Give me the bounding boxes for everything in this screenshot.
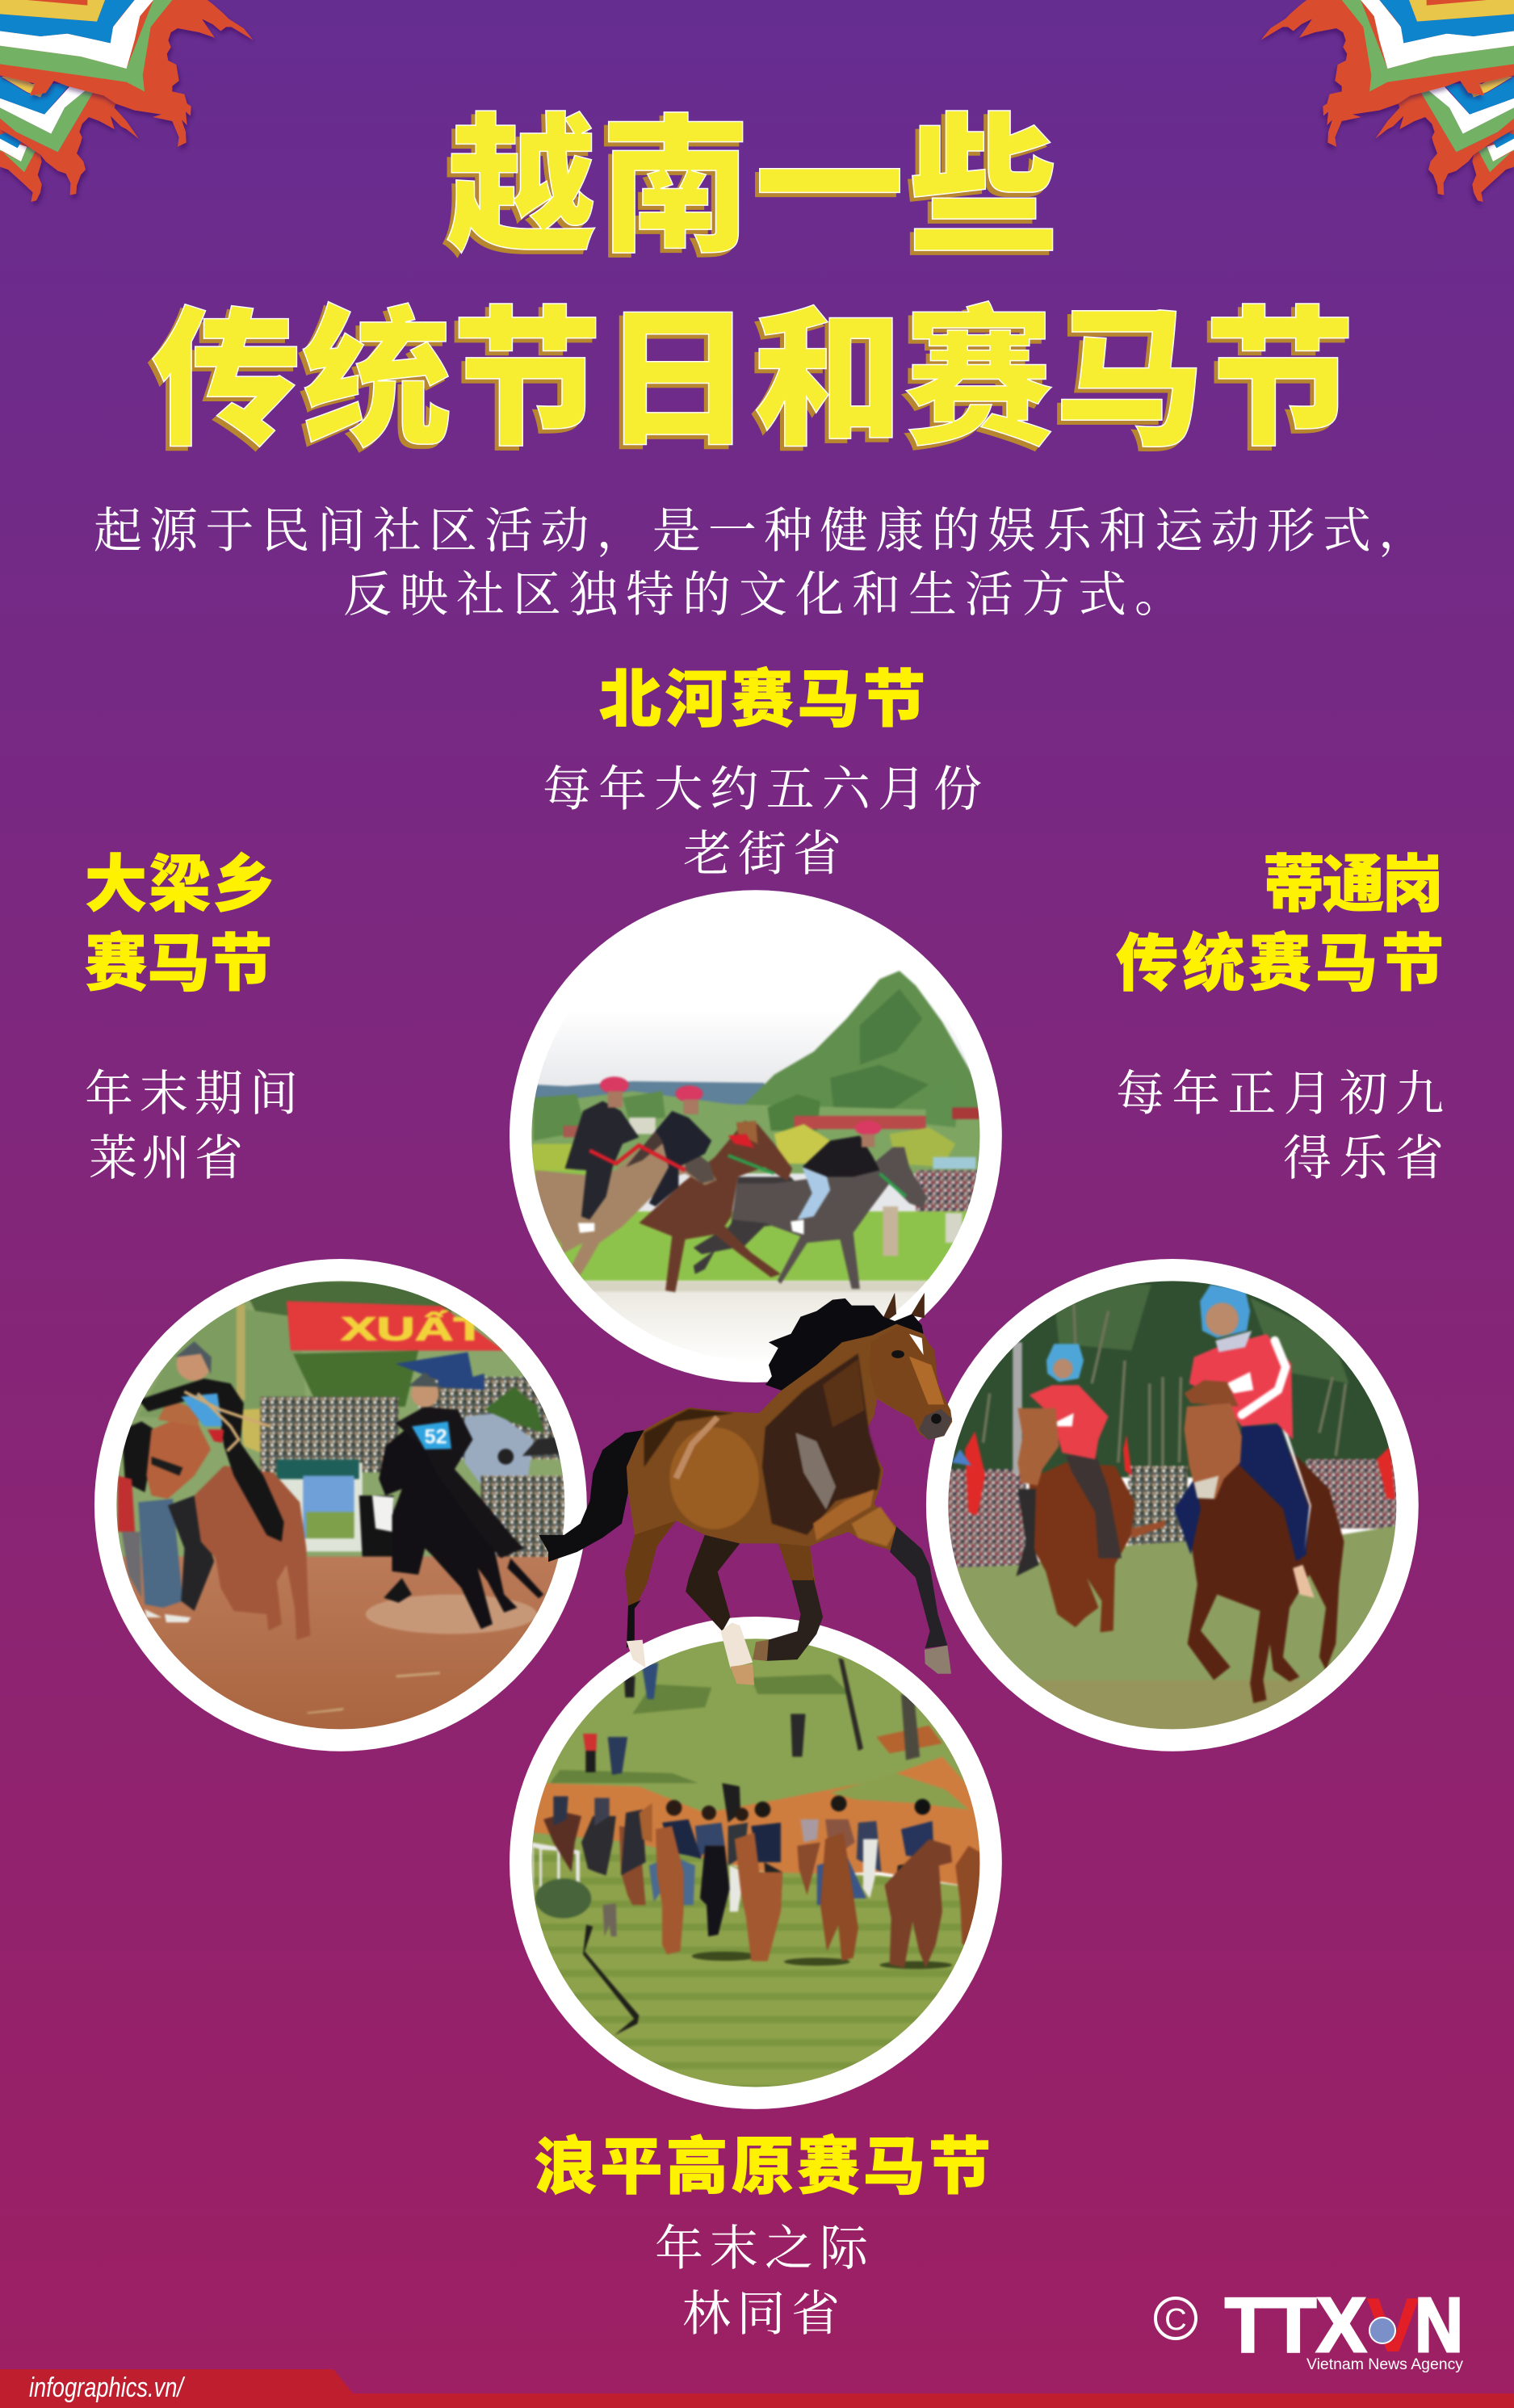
heading: Da Nang commune race: [85, 835, 275, 1004]
logo: copyright and agency: N: [1415, 2282, 1463, 2368]
photo circle: Lai Chau race: 52: [425, 1426, 447, 1449]
heading: Lam Dong race: 浪平高原赛马节: [535, 2117, 991, 2207]
text: Dak Lak time and place: [1116, 1055, 1444, 1189]
logo: copyright and agency: V: [1366, 2282, 1420, 2368]
photo circle: Lai Chau race: [94, 1259, 587, 1751]
text: Dak Lak time and place: 每年正月初九: [1116, 1055, 1444, 1125]
horse far hind leg: [686, 1535, 740, 1631]
text: Dak Lak time and place: 得乐省: [1283, 1120, 1444, 1189]
text: Lai Chau time and place: [85, 1055, 298, 1189]
text: Bac Ha time and place: 老街省: [683, 816, 841, 885]
intro text: 起源于民间社区活动，是一种健康的娱乐和运动形式，: [94, 493, 1427, 562]
heading: Da Nang commune race: 大梁乡: [85, 835, 275, 925]
running horse: [539, 1293, 952, 1685]
text: Lam Dong time and place: 年末之际: [655, 2210, 869, 2280]
intro text: [94, 493, 1427, 626]
horse raised front leg: [890, 1526, 947, 1648]
title: 越南一些: [447, 65, 1059, 283]
text: Lam Dong time and place: [655, 2210, 869, 2345]
horse body shading: [644, 1353, 896, 1546]
horse tail: [539, 1430, 644, 1562]
heading: Da Nang commune race: 赛马节: [85, 914, 272, 1004]
photo circle: Lam Dong plateau race: [510, 1617, 1002, 2109]
text: Lai Chau time and place: 莱州省: [89, 1120, 243, 1189]
corner ornament: top left: [0, 0, 253, 202]
intro text: 反映社区独特的文化和生活方式。: [343, 556, 1183, 626]
heading: Tich Thong race: [1116, 835, 1444, 1004]
horse head: [869, 1325, 950, 1440]
horse near front leg: [765, 1577, 823, 1661]
heading: Tich Thong race: 传统赛马节: [1116, 914, 1444, 1004]
logo: copyright and agency: Vietnam News Agency: [1306, 2356, 1464, 2373]
horse ears: [883, 1293, 925, 1319]
text: Lai Chau time and place: 年末期间: [85, 1055, 298, 1125]
text: Bac Ha time and place: [543, 751, 982, 885]
corner ornament: top right: [1261, 0, 1514, 202]
title: [151, 65, 1355, 476]
horse body: [625, 1315, 952, 1609]
footer band: [0, 2369, 1514, 2408]
photo circle: Bac Ha race: [510, 890, 1002, 1382]
horse mane: [765, 1298, 924, 1391]
photo circle: Lai Chau race: XUẤT: [341, 1310, 486, 1347]
text: Lam Dong time and place: 林同省: [682, 2276, 840, 2345]
logo: copyright and agency: C: [1164, 2303, 1187, 2337]
heading: Bac Ha race: 北河赛马节: [599, 650, 925, 740]
logo: copyright and agency: TTX: [1225, 2282, 1366, 2368]
logo: copyright and agency: [1155, 2282, 1464, 2373]
footer source link: infographics.vn/: [29, 2372, 186, 2403]
horse hind leg: [625, 1521, 676, 1609]
heading: Tich Thong race: 蒂通岗: [1263, 835, 1444, 925]
horse socks and hooves: [627, 1623, 753, 1668]
photo circle: Dak Lak race: [926, 1259, 1419, 1751]
title: 传统节日和赛马节: [151, 258, 1355, 476]
text: Bac Ha time and place: 每年大约五六月份: [543, 751, 982, 820]
